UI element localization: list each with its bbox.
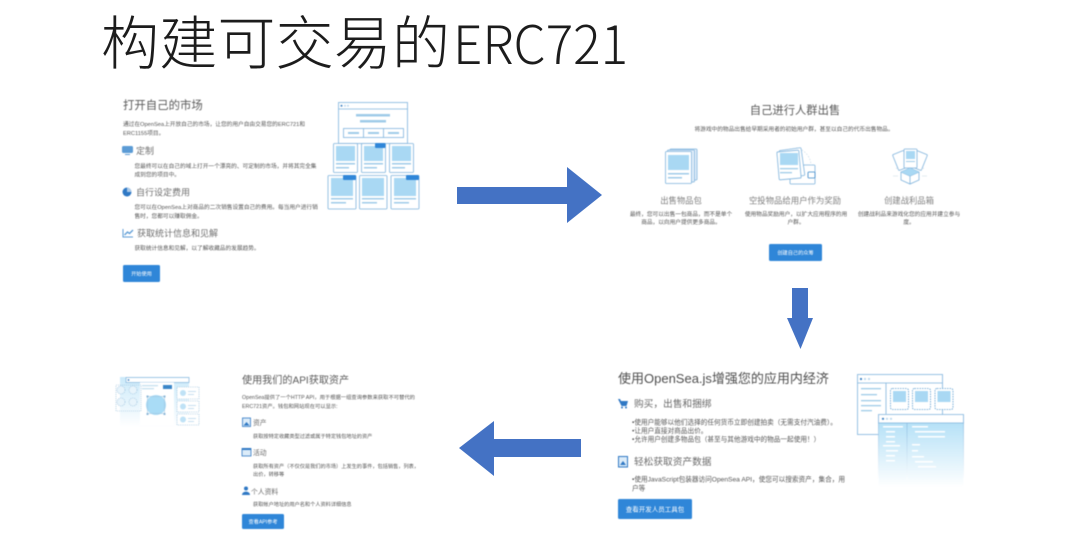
heading: set your own fees: 自行设定费用: [136, 186, 190, 198]
icon: loot box: [892, 149, 928, 184]
item label: loot boxes: 创建战利品箱: [884, 196, 934, 206]
heading: opensea.js: 使用OpenSea.js增强您的应用内经济: [618, 371, 829, 386]
text block: bullet list: •让用户直接对商品出价。: [632, 426, 707, 435]
button: get started: [123, 265, 160, 282]
icon: pie chart: [122, 188, 132, 196]
icon: monitor: [122, 146, 133, 155]
text block: fees: 您可以在OpenSea上对商品的二次销售设置自己的费用。每当用户进行销: [134, 203, 318, 211]
item label: loot boxes: [858, 196, 960, 226]
card: [334, 144, 358, 172]
text block: api intro: OpenSea提供了一个HTTP API，用于根据一组查询参数来获取不可替代的: [242, 393, 415, 401]
icon: line chart: [123, 229, 133, 237]
arrow: left: [459, 421, 581, 476]
text block: api intro: [242, 393, 415, 410]
panel: opensea.js: [618, 371, 964, 519]
heading: marketplace: 打开自己的市场: [123, 98, 203, 112]
heading: activity: 活动: [253, 448, 267, 457]
text block: javascript wrapper: •使用JavaScript包装器访问OpenSea API，使您可以搜索资产，集合，用: [632, 474, 845, 484]
button: api reference: 查看API参考: [248, 518, 278, 526]
heading: easy asset data: 轻松获取资产数据: [634, 455, 712, 468]
text block: javascript wrapper: 户等: [632, 484, 646, 492]
icon: item pack: [666, 149, 697, 184]
illustration: code windows: [858, 374, 964, 487]
text block: statistics: 获取统计信息和见解，以了解收藏品的发展趋势。: [134, 244, 260, 252]
card with badge: [391, 175, 419, 209]
heading: crowd sale: 自己进行人群出售: [750, 103, 840, 117]
item label: sell packs: 出售物品包: [660, 196, 702, 206]
text block: bullet list: •使用户能够以他们选择的任何货币立即创建拍卖（无需支付汽油费）。: [632, 418, 837, 426]
illustration: storefront with item cards: [328, 102, 419, 209]
title: 构建可交易的: [101, 12, 450, 77]
card with badge: [362, 143, 386, 172]
icon: user: [242, 486, 250, 495]
item text: 商品，以向用户提供更多商品。: [641, 218, 721, 226]
item text: 户群。: [787, 218, 805, 226]
item text: 使用物品奖励用户，以扩大应用程序的用: [745, 210, 847, 218]
arrow: right: [457, 167, 602, 223]
item text: 创建战利品来游戏化您的应用并建立参与: [858, 210, 960, 218]
text block: customize: 您最终可以在自己的域上打开一个漂亮的、可定制的市场，并将其完全集: [134, 162, 317, 170]
panel: open your own marketplace: [122, 98, 419, 282]
icon: asset image: [242, 418, 250, 426]
text block: profile: 获取帐户地址的用户名和个人资料详细信息: [253, 500, 352, 508]
arrow: down: [787, 288, 813, 349]
heading: profile: 个人资料: [251, 487, 278, 496]
button: developer tools: [618, 499, 692, 519]
button: developer tools: 查看开发人员工具包: [626, 504, 685, 514]
text block: bullet list: [632, 418, 837, 444]
heading: customize: 定制: [136, 145, 154, 156]
button: get started: 开始使用: [131, 270, 152, 278]
item text: 度。: [903, 218, 915, 226]
text block: activity: 获取所有资产（不仅仅是我们的市场）上发生的事件，包括销售，列表，: [253, 462, 419, 470]
button: create your own crowdsale: 创建自己的众筹: [777, 248, 814, 256]
title: [101, 4, 628, 80]
panel: api: [116, 374, 419, 529]
button: api reference: [242, 514, 284, 529]
text block: bullet list: •允许用户创建多物品包（甚至与其他游戏中的物品一起使用！）: [632, 434, 820, 444]
text block: customize: 成到您的项目中。: [134, 170, 180, 178]
item text: 最终，您可以出售一包商品，而不是单个: [630, 210, 732, 218]
item label: airdrop rewards: [745, 196, 847, 226]
illustration: api windows: [116, 377, 199, 427]
text block: activity: 出价，转移等: [253, 470, 284, 478]
item label: sell packs: [630, 196, 732, 226]
text block: activity: [253, 462, 419, 478]
item text: [630, 210, 732, 226]
heading: statistics and insights: 获取统计信息和见解: [137, 228, 218, 238]
icon: airdrop cards and wallet: [777, 148, 815, 184]
text block: fees: 售时，您都可以赚取佣金。: [134, 212, 203, 220]
icon: image file: [618, 456, 628, 467]
title: ERC721: [453, 4, 628, 80]
text block: fees: [134, 203, 318, 220]
text block: marketplace intro: ERC1155项目。: [123, 130, 164, 137]
panel: sell to your own crowd: [630, 103, 960, 261]
text block: customize: [134, 162, 317, 178]
item text: [745, 210, 847, 226]
item label: airdrop rewards: 空投物品给用户作为奖励: [749, 196, 841, 206]
icon: cart: [618, 399, 628, 408]
icon: calendar: [242, 448, 251, 456]
text block: marketplace intro: [123, 120, 305, 137]
button: create your own crowdsale: [769, 244, 822, 261]
text block: javascript wrapper: [632, 474, 845, 492]
text block: marketplace intro: 通过在OpenSea上开放自己的市场，让您的用户自由交易您的ERC721和: [123, 120, 305, 128]
text block: crowd sale intro: 将游戏中的物品出售给早期采用者的初始用户群，甚至以自己的代币出售物品。: [694, 125, 894, 133]
text block: assets: 获取按特定收藏类型过滤或属于特定钱包地址的资产: [253, 432, 372, 440]
card: [360, 176, 387, 209]
card: [390, 144, 414, 172]
heading: assets: 资产: [253, 418, 267, 427]
heading: buy sell bundle: 购买，出售和捆绑: [634, 397, 712, 410]
text block: api intro: ERC721资产。钱包和网站现在可以显示:: [242, 402, 338, 410]
card with badge: [328, 175, 356, 209]
item text: [858, 210, 960, 226]
heading: api: 使用我们的API获取资产: [242, 374, 349, 386]
